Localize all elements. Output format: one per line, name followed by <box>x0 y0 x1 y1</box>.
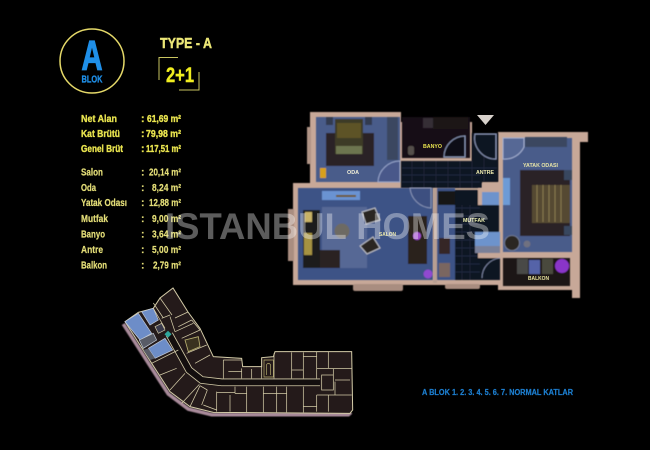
location marker <box>164 331 172 338</box>
room areas: 9,00 m² <box>152 213 181 225</box>
icon: entrance arrow <box>477 115 494 125</box>
watermark: ISTANBUL HOMES <box>165 206 490 247</box>
room areas: 5,00 m² <box>152 244 181 256</box>
room areas: 3,64 m² <box>152 228 181 240</box>
room areas: : <box>141 228 144 240</box>
area summary: : <box>141 128 144 140</box>
room areas: Antre <box>81 244 103 256</box>
label: salon: SALON <box>379 232 396 238</box>
room areas: Yatak Odası <box>81 197 127 209</box>
room: mutfak <box>433 182 500 283</box>
room areas: Salon <box>81 166 103 178</box>
block badge <box>60 29 124 93</box>
room: balkon <box>503 258 570 286</box>
unit dividers <box>152 298 352 412</box>
area summary: Net Alan <box>81 113 117 125</box>
room: antre <box>401 133 498 188</box>
room areas: : <box>141 260 144 272</box>
area summary: : <box>141 143 144 155</box>
type heading: TYPE - A <box>160 36 212 52</box>
room: banyo <box>402 117 470 158</box>
room areas: : <box>141 213 144 225</box>
room areas: 12,88 m² <box>149 197 181 209</box>
room areas: : <box>141 244 144 256</box>
room areas: Oda <box>81 182 96 194</box>
label: antre: ANTRE <box>476 170 494 176</box>
area summary: 79,98 m² <box>146 128 181 140</box>
room count box: 2+1 <box>166 64 194 87</box>
room areas: 20,14 m² <box>149 166 181 178</box>
area summary: 61,69 m² <box>147 113 181 125</box>
floor plan <box>288 112 588 298</box>
room: oda <box>316 117 400 182</box>
room areas: : <box>141 182 144 194</box>
room areas: : <box>141 197 144 209</box>
highlighted units <box>125 313 152 340</box>
area summary: Kat Brütü <box>81 128 120 140</box>
area summary: Genel Brüt <box>81 143 123 155</box>
area summary: : <box>141 113 144 125</box>
label: mutfak: MUTFAK <box>463 218 485 224</box>
room count box <box>159 58 199 90</box>
block badge: A <box>82 32 102 79</box>
room areas: Mutfak <box>81 213 108 225</box>
floors note: A BLOK 1. 2. 3. 4. 5. 6. 7. NORMAL KATLAR <box>422 388 573 397</box>
room areas: Balkon <box>81 260 107 272</box>
label: balkon: BALKON <box>528 276 549 282</box>
room: salon <box>298 188 433 280</box>
room areas: : <box>141 166 144 178</box>
lift <box>264 360 273 377</box>
label: banyo: BANYO <box>423 144 443 150</box>
building outline <box>125 288 353 413</box>
area summary: 117,51 m² <box>146 143 181 155</box>
building glow <box>123 324 351 415</box>
room areas <box>81 166 181 272</box>
room areas: 8,24 m² <box>152 182 181 194</box>
block badge: BLOK <box>82 74 103 86</box>
room: yatak odası <box>503 137 572 252</box>
label: oda: ODA <box>347 170 359 176</box>
corridor <box>169 334 320 382</box>
label: yatak odası: YATAK ODASI <box>523 163 559 169</box>
room areas: 2,79 m² <box>153 260 181 272</box>
stairs <box>185 337 200 352</box>
room areas: Banyo <box>81 228 105 240</box>
walls <box>288 112 588 298</box>
building key plan <box>123 288 353 415</box>
area summary <box>81 113 181 155</box>
